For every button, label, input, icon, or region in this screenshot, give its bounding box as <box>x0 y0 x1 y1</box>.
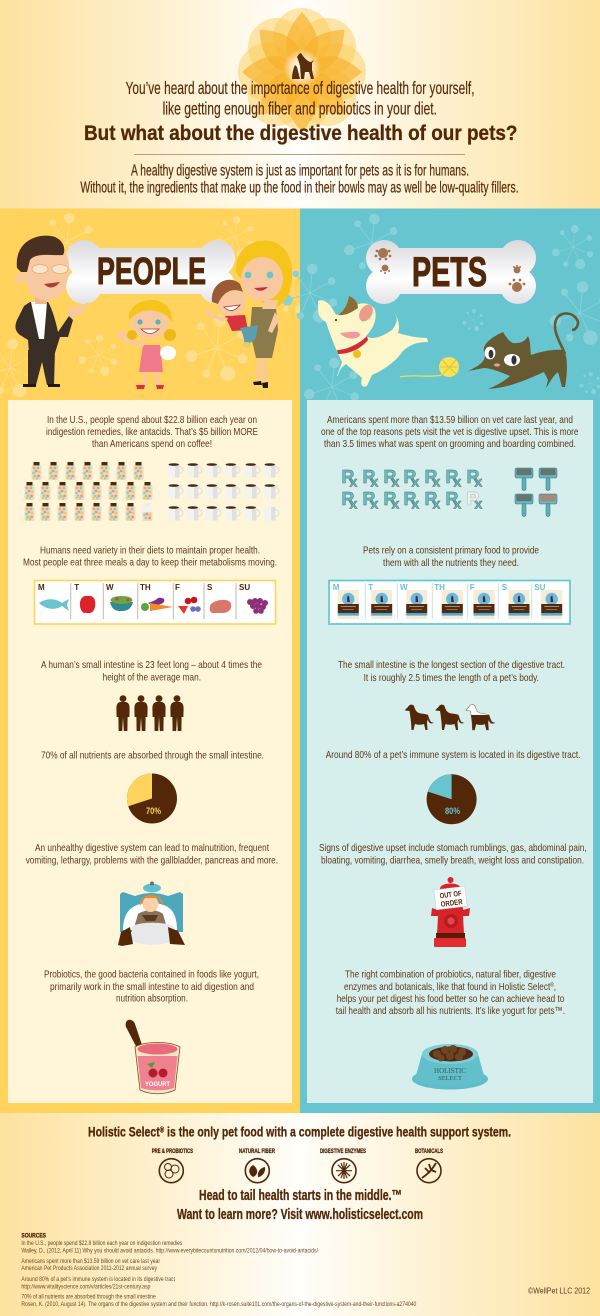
stat text: probiotics: primarily work in the small intestine to aid digestion and <box>50 981 254 993</box>
chart: prescription symbols: R <box>384 467 396 487</box>
illustration: yogurt cup <box>126 1020 180 1094</box>
chart: prescription symbols: R <box>404 467 416 487</box>
heading intro: like getting enough fiber and probiotics in your diet. <box>163 98 437 118</box>
chart: prescription symbols: x <box>370 496 378 512</box>
stat text: probiotics: Probiotics, the good bacteria contained in foods like yogurt, <box>44 969 259 981</box>
chart: 80 percent pie <box>427 774 477 824</box>
icon: paw prints <box>375 248 525 292</box>
chart: weekly human meals: TH <box>140 583 151 592</box>
subtitle text <box>80 163 519 197</box>
stat text: nutrients absorbed: 70% of all nutrients are absorbed through the small intestine. <box>41 749 264 761</box>
icon: natural fiber: NATURAL FIBER <box>239 1148 275 1155</box>
icon: vegetables <box>141 598 173 611</box>
icon: botanicals: BOTANICALS <box>415 1148 443 1155</box>
sources: http://www.vitalityscience.com/v/articles/21st-century.asp <box>21 1283 151 1290</box>
chart: prescription symbols: x <box>392 474 400 490</box>
panel: pets <box>282 208 600 1113</box>
chart: antacid bottles <box>24 462 152 521</box>
illustration: yarn ball <box>400 357 459 377</box>
chart: prescription symbols: R <box>342 467 354 487</box>
illustration: woman holding boy <box>205 240 292 388</box>
header background <box>0 0 600 209</box>
illustration: sick person in bed <box>118 882 185 946</box>
chart: grooming brushes <box>515 468 557 517</box>
chart: weekly human meals: T <box>74 583 79 592</box>
chart: weekly pet food: M <box>333 583 340 592</box>
stat text: indigestion spend <box>46 414 258 450</box>
stat text: pet consistency: them with all the nutrients they need. <box>383 557 519 569</box>
chart: prescription symbols <box>342 467 482 512</box>
call to action: Want to learn more? Visit www.holisticselect.com <box>177 1207 423 1223</box>
stat text: vet care spend <box>321 414 579 450</box>
chart: weekly human meals: SU <box>239 583 250 592</box>
chart: weekly pet food: S <box>502 583 508 592</box>
sources: Rosen, K. (2010, August 14). The organs of the digestive system and their function. http://k-rosen.suite101.com/the-organs-of-the-digestive-system-and-their-functions-a274040 <box>21 1301 417 1308</box>
icon: salad <box>110 596 133 611</box>
illustration: pet food bowl: SELECT <box>438 1075 462 1082</box>
illustration: pet food bowl: HOLISTIC <box>434 1067 466 1075</box>
stat text: indigestion spend: indigestion remedies, like antacids. That’s $5 billion MORE <box>46 426 258 438</box>
sources: Around 80% of a pet’s immune system is located in its digestive tract <box>21 1276 175 1283</box>
icon: golden lotus flower with pet silhouette <box>238 8 366 132</box>
illustration: man in suit <box>15 236 89 387</box>
icon: natural fiber <box>239 1148 275 1183</box>
chart: prescription symbols: R <box>424 467 438 487</box>
chart: 70 percent pie: 70% <box>146 806 161 817</box>
chart: weekly human meals: W <box>106 583 114 592</box>
chart: four human silhouettes <box>116 695 184 731</box>
chart: weekly pet food: T <box>368 583 373 592</box>
icon: pre and probiotics: PRE & PROBIOTICS <box>152 1148 193 1155</box>
heading: pets: PETS <box>412 248 487 295</box>
stat text: unhealthy system <box>26 842 278 866</box>
panel: people <box>0 208 313 1113</box>
stat text: human intestine <box>41 659 262 684</box>
icon: berries <box>178 597 201 614</box>
stat text: unhealthy system: An unhealthy digestive system can lead to malnutrition, frequent <box>35 842 269 854</box>
icon: fish <box>39 599 69 611</box>
chart: prescription symbols: R <box>446 467 458 487</box>
illustration: pet food bowl <box>412 1044 488 1090</box>
chart: prescription symbols: x <box>350 474 358 490</box>
chart: prescription symbols: R <box>466 467 480 487</box>
sources: American Pet Products Association 2011-2012 annual survey <box>21 1265 158 1272</box>
footer background <box>0 1112 600 1316</box>
heading intro <box>126 78 474 118</box>
sign: out of order: ORDER <box>440 897 464 909</box>
chart: prescription symbols: R <box>446 489 458 509</box>
title: But what about the digestive health of our pets? <box>84 121 518 145</box>
sign: out of order: OUT OF <box>439 889 462 900</box>
chart: prescription symbols: R <box>342 489 354 509</box>
stat text: human intestine: A human’s small intestine is 23 feet long – about 4 times the <box>41 659 262 671</box>
stat text: indigestion spend: In the U.S., people spend about $22.8 billion each year on <box>47 414 257 426</box>
chart: weekly pet food: F <box>470 583 475 592</box>
stat text: probiotics: nutrition absorption. <box>116 993 188 1005</box>
stat text: indigestion spend: than Americans spend on coffee! <box>92 438 212 450</box>
chart: 80 percent pie: 80% <box>445 806 460 817</box>
icon: grapes <box>247 598 268 614</box>
stat text: pet consistency: Pets rely on a consistent primary food to provide <box>363 544 539 556</box>
stat text: human variety: Most people eat three meals a day to keep their metabolisms moving. <box>23 557 277 569</box>
tagline: Head to tail health starts in the middle.™ <box>199 1188 402 1204</box>
chart: prescription symbols: x <box>474 474 482 490</box>
stat text: signs of upset <box>319 842 587 866</box>
sources: Americans spent more than $13.59 billion on vet care last year <box>21 1258 161 1265</box>
sources: In the U.S., people spend $22.8 billion each year on indigestion remedies <box>21 1240 183 1247</box>
chart: prescription symbols: R <box>362 489 376 509</box>
icon: digestive enzymes <box>320 1148 366 1183</box>
chart: prescription symbols: R <box>384 489 396 509</box>
chart: prescription symbols: x <box>412 474 420 490</box>
chart: prescription symbols: R <box>466 489 480 509</box>
icon: apple <box>80 596 95 613</box>
chart: weekly pet food: W <box>400 583 408 592</box>
sign: out of order <box>434 886 467 910</box>
chart: prescription symbols: x <box>432 474 440 490</box>
footer headline: ® <box>160 1126 164 1135</box>
chart: prescription symbols: x <box>454 496 462 512</box>
chart: prescription symbols: R <box>424 489 438 509</box>
heading: people: PEOPLE <box>97 251 206 293</box>
chart: prescription symbols: x <box>432 496 440 512</box>
sources: Walley, D., (2012, April 11) Why you should avoid antacids. http://www.everybitecountsnutrition.com/2012/04/how-to-avoid-antacids/ <box>21 1248 318 1254</box>
chart: weekly pet food: SU <box>534 583 546 592</box>
icon: steak <box>210 600 231 613</box>
footer headline: Holistic Select <box>88 1124 184 1140</box>
chart: dog silhouettes <box>405 705 495 730</box>
chart: prescription symbols: x <box>392 496 400 512</box>
chart: weekly pet food: TH <box>434 583 445 592</box>
stat text: right combination: enzymes and botanicals, like that found in Holistic Select <box>344 981 600 993</box>
stat text: human intestine: height of the average man. <box>103 672 201 684</box>
chart: weekly human meals: S <box>207 583 213 592</box>
stat text: pet intestine: It is roughly 2.5 times the length of a pet’s body. <box>364 672 539 684</box>
illustration: dog <box>318 296 428 387</box>
illustration: cat <box>468 313 578 389</box>
stat text: human variety <box>23 544 277 569</box>
chart: coffee mugs <box>168 463 279 520</box>
chart: prescription symbols: x <box>350 496 358 512</box>
illustration: yogurt cup: YOGURT <box>145 1081 170 1088</box>
people inner card <box>8 400 292 1103</box>
sources <box>21 1232 417 1308</box>
chart: prescription symbols: R <box>362 467 376 487</box>
sources: SOURCES <box>21 1232 46 1239</box>
chart: weekly human meals: F <box>175 583 180 592</box>
bone banner: pets <box>366 240 536 304</box>
sources: 70% of all nutrients are absorbed through the small intestine <box>21 1294 156 1301</box>
stat text: unhealthy system: vomiting, lethargy, problems with the gallbladder, pancreas and more. <box>26 854 278 866</box>
chart: weekly human meals: M <box>38 583 45 592</box>
stat text: right combination: , <box>554 981 556 993</box>
icon row: support system <box>152 1148 443 1183</box>
illustration: girl with puppy <box>115 300 176 389</box>
stat text: pet intestine <box>338 659 565 684</box>
icon: botanicals <box>415 1148 443 1183</box>
icon: digestive enzymes: DIGESTIVE ENZYMES <box>320 1148 366 1155</box>
chart: weekly pet food <box>329 580 570 624</box>
chart: 70 percent pie <box>127 774 177 824</box>
icon: pre and probiotics <box>152 1148 193 1183</box>
chart: prescription symbols: x <box>454 474 462 490</box>
pets inner card <box>307 400 593 1103</box>
chart: prescription symbols: x <box>474 496 482 512</box>
chart: prescription symbols: x <box>370 474 378 490</box>
stat text: human variety: Humans need variety in their diets to maintain proper health. <box>40 544 260 556</box>
bone banner: people <box>66 240 235 304</box>
chart: weekly human meals <box>34 580 276 624</box>
stat text: pet consistency <box>363 544 539 569</box>
chart: prescription symbols: x <box>412 496 420 512</box>
stat text: right combination: ® <box>550 982 554 989</box>
stat text: right combination <box>336 969 565 1017</box>
chart: prescription symbols: R <box>404 489 416 509</box>
illustration: out-of-order hydrant <box>431 877 470 947</box>
stat text: probiotics <box>44 969 259 1005</box>
